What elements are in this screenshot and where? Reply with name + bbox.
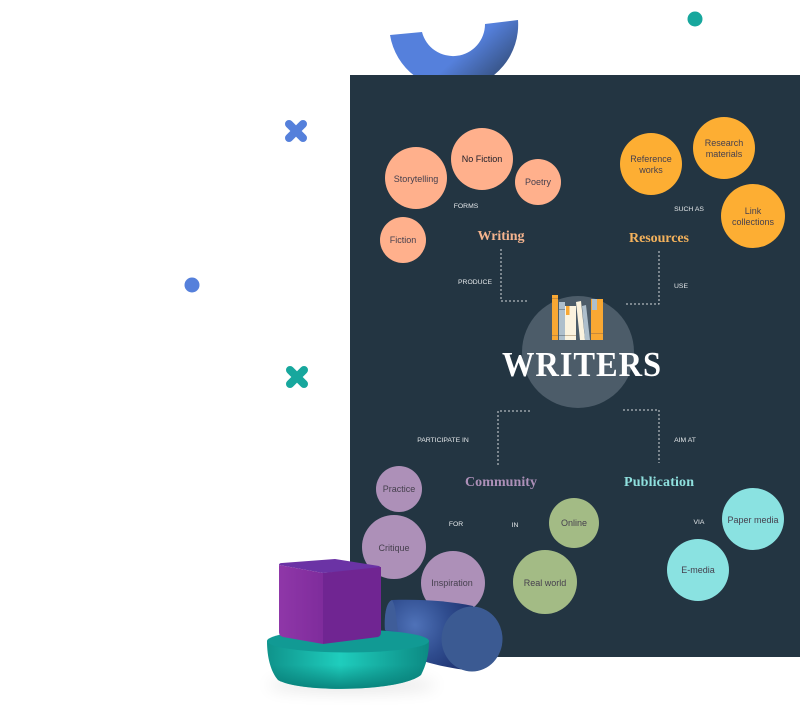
cube — [279, 559, 381, 644]
node: Fiction: Fiction — [390, 235, 416, 245]
node: Fiction — [380, 217, 426, 263]
branch: publication — [623, 410, 784, 601]
node: Research materials: Research — [705, 138, 743, 148]
node: Paper media — [722, 488, 784, 550]
icon: half ring — [390, 20, 518, 89]
heading: Publication: Publication — [624, 475, 694, 490]
connector: resources — [625, 251, 659, 304]
connector: writing — [501, 249, 529, 301]
icon: teal cross — [290, 370, 304, 384]
title: WRITERS — [502, 345, 662, 384]
node: E-media: E-media — [681, 565, 715, 575]
label: for: FOR — [449, 521, 463, 528]
icon: teal dot — [688, 12, 702, 26]
label: produce: PRODUCE — [458, 279, 492, 286]
icon: blue dot — [184, 278, 200, 292]
node: Inspiration — [421, 551, 485, 615]
label: use: USE — [674, 283, 688, 290]
center: writers — [502, 295, 662, 408]
node: Paper media: Paper media — [727, 515, 779, 525]
node: Storytelling — [385, 147, 447, 209]
node: Research materials — [693, 117, 755, 179]
node: Online — [549, 498, 599, 548]
icon: blue cross — [289, 124, 303, 138]
node: Practice: Practice — [383, 484, 415, 494]
label: such as: SUCH AS — [674, 206, 704, 213]
node: Link collections — [721, 184, 785, 248]
icon: books — [552, 295, 603, 340]
node: Reference works — [620, 133, 682, 195]
node: Link collections: collections — [732, 217, 775, 227]
node: Inspiration: Inspiration — [431, 578, 473, 588]
heading: Community: Community — [465, 475, 537, 490]
node: Poetry — [515, 159, 561, 205]
connector: publication — [623, 410, 659, 463]
shadow — [267, 679, 437, 691]
heading: Resources: Resources — [629, 231, 690, 246]
panel: concept map — [350, 75, 800, 657]
node: No Fiction — [451, 128, 513, 190]
node: E-media — [667, 539, 729, 601]
node: Critique: Critique — [378, 543, 410, 553]
node: Link collections: Link — [745, 206, 762, 216]
node: Storytelling: Storytelling — [394, 174, 438, 184]
cylinder — [385, 600, 502, 672]
circle backdrop — [522, 296, 634, 408]
label: forms: FORMS — [454, 203, 479, 210]
label: via: VIA — [694, 519, 705, 526]
node: No Fiction: No Fiction — [462, 154, 502, 164]
node: Reference works: works — [638, 165, 663, 175]
branch: resources — [620, 117, 785, 304]
label: participate in: PARTICIPATE IN — [417, 437, 469, 444]
3D shapes: cube, bowl and cylinder — [267, 559, 502, 691]
node: Online: Online — [561, 518, 587, 528]
node: Research materials: materials — [706, 149, 743, 159]
branch: community — [362, 411, 599, 615]
heading: Writing: Writing — [478, 229, 524, 244]
label: aim at: AIM AT — [674, 437, 696, 444]
branch: writing — [380, 128, 561, 301]
node: Real world: Real world — [524, 578, 566, 588]
connector: community — [498, 411, 531, 465]
bowl — [267, 630, 429, 689]
node: Critique — [362, 515, 426, 579]
node: Real world — [513, 550, 577, 614]
node: Poetry: Poetry — [525, 177, 552, 187]
node: Reference works: Reference — [630, 154, 672, 164]
node: Practice — [376, 466, 422, 512]
label: in: IN — [512, 522, 518, 529]
